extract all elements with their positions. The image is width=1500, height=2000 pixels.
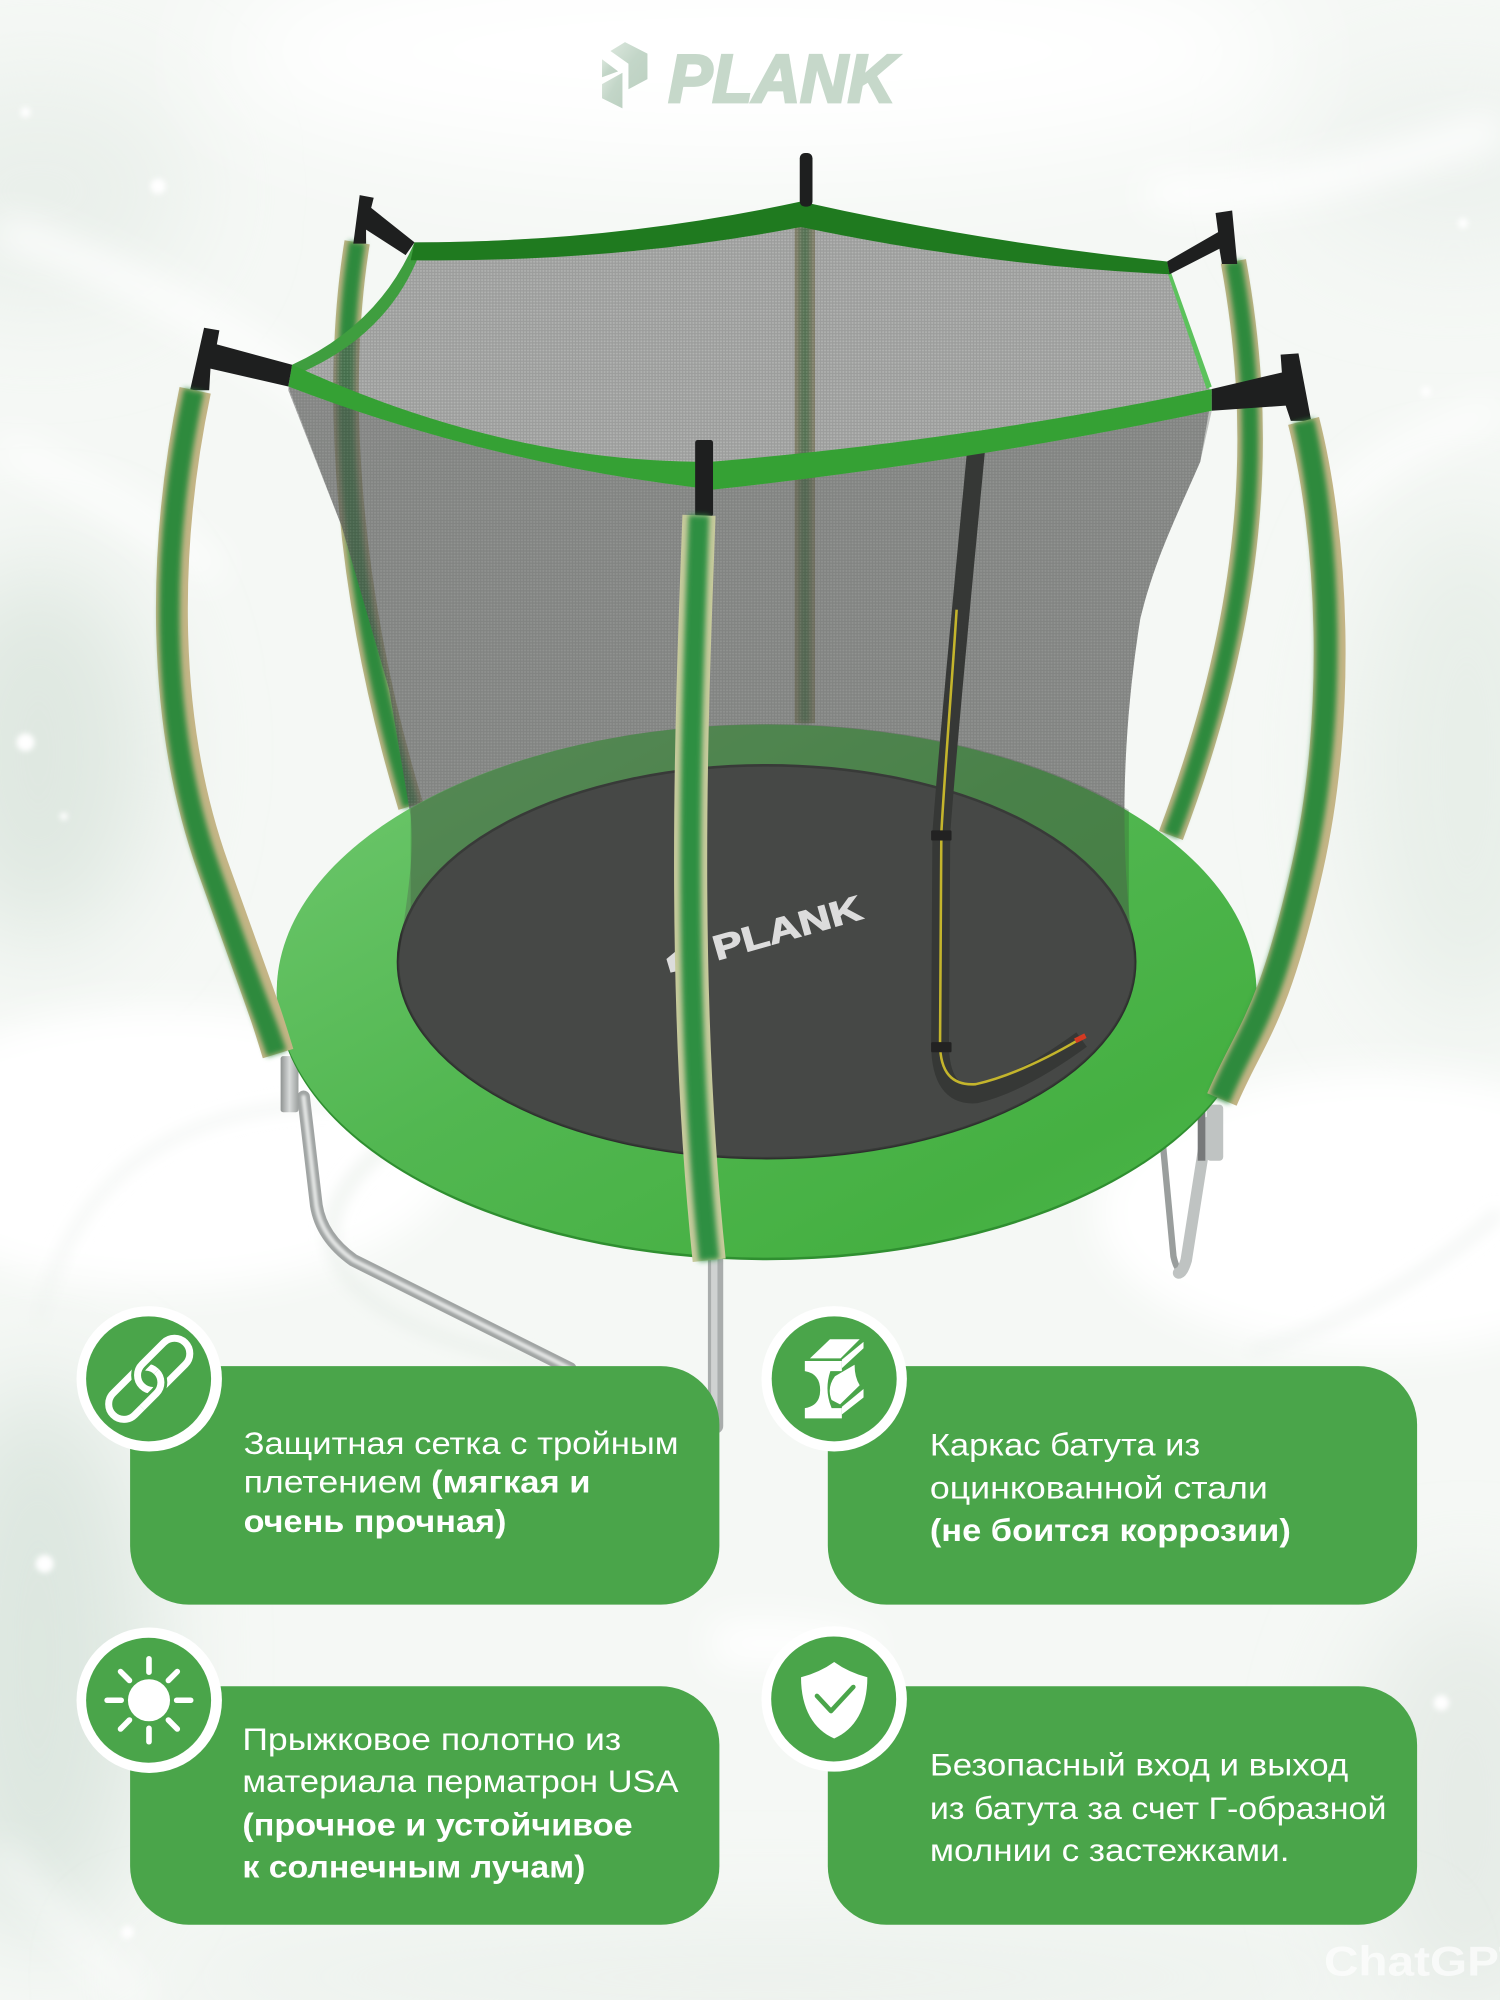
card text: плетением: [244, 1464, 422, 1499]
padded ring: [277, 724, 1256, 1260]
card background: [130, 1366, 719, 1605]
mat logo: [667, 889, 866, 972]
front centre padded pole: [691, 515, 709, 1260]
steel legs: [281, 1056, 1223, 1426]
side rim straps: [292, 242, 1212, 389]
card text: Каркас батута из: [930, 1427, 1200, 1462]
card text: (не боится коррозии): [930, 1513, 1291, 1548]
back centre post: [800, 153, 812, 207]
card text: Прыжковое полотно из: [242, 1722, 621, 1757]
card text: Безопасный вход и выход: [930, 1748, 1348, 1783]
back rim strap: [411, 202, 1170, 274]
front left leg: [281, 1056, 570, 1369]
card background: [130, 1686, 719, 1925]
black post brackets: [190, 153, 1311, 517]
jumping mat: [398, 765, 1135, 1158]
front centre post: [695, 440, 713, 517]
icon: steel beam: [761, 1306, 907, 1452]
front right padded pole: [1219, 421, 1330, 1099]
card text: [244, 1426, 679, 1539]
back pole left: [346, 242, 411, 806]
card text: к солнечным лучам): [242, 1850, 585, 1885]
back left bracket: [353, 195, 415, 255]
icon: chain link: [77, 1306, 222, 1452]
card text: (прочное и устойчивое: [242, 1807, 633, 1842]
panel: safe entry: [761, 1626, 1417, 1925]
icon: shield with check: [761, 1626, 907, 1772]
trampoline illustration: [169, 153, 1330, 1426]
back pole right: [1171, 261, 1250, 835]
panel: galvanized frame: [761, 1306, 1417, 1605]
card text: очень прочная): [244, 1504, 506, 1539]
card background: [828, 1686, 1417, 1925]
front right bracket: [1212, 353, 1311, 421]
card text: [930, 1748, 1386, 1868]
card text: из батута за счет Г-образной: [930, 1791, 1386, 1826]
panel: jumping surface: [77, 1628, 719, 1925]
card text: молнии с застежками.: [930, 1833, 1290, 1868]
logo: PLANK: [602, 42, 899, 117]
card text: оцинкованной стали: [930, 1471, 1268, 1506]
mat logo: PLANK: [709, 889, 866, 968]
back pole centre: [795, 210, 815, 723]
card text: материала перматрон USA: [242, 1764, 679, 1799]
panel: safety net: [77, 1306, 719, 1605]
card background: [828, 1366, 1417, 1605]
watermark: ChatGPT: [1324, 1938, 1500, 1985]
zipper: [931, 440, 1085, 1095]
back right bracket: [1167, 210, 1237, 274]
card text: [930, 1427, 1291, 1548]
front centre leg: [714, 1256, 716, 1426]
card text: Защитная сетка с тройным: [244, 1426, 679, 1461]
safety net front layer: [288, 386, 1212, 1158]
front rim strap: [288, 365, 1212, 490]
card text: (мягкая и: [431, 1464, 591, 1499]
front left bracket: [190, 328, 292, 390]
card text: [242, 1722, 679, 1885]
logo icon: [602, 42, 647, 108]
icon: sun: [77, 1628, 222, 1773]
back right leg: [1163, 1105, 1223, 1273]
logo wordmark: PLANK: [668, 42, 899, 117]
safety net back layer: [288, 204, 1212, 969]
front left padded pole: [169, 390, 278, 1054]
